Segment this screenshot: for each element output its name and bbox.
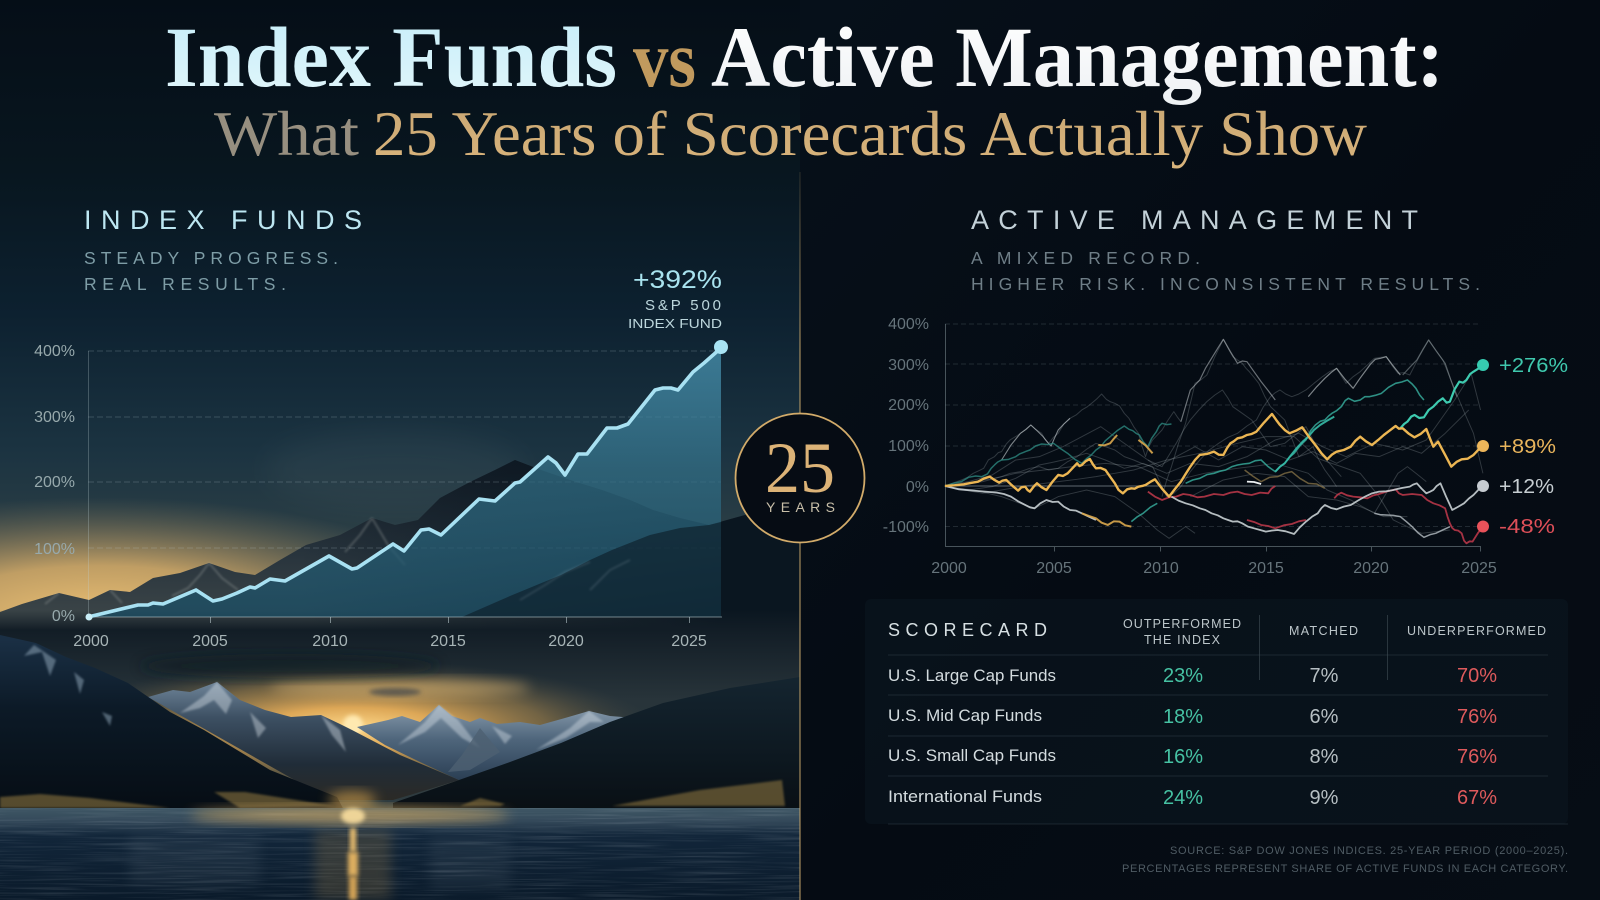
center divider [799,172,801,900]
subtitle: 25 Years of Scorecards Actually Show [373,99,1368,169]
x axis [88,616,722,618]
x axis labels: 2015 [1248,560,1284,577]
faint fund lines [945,339,1483,543]
area under line [88,348,721,617]
y axis labels: 0% [52,608,75,625]
chart grid [88,351,721,548]
heading: active management: ACTIVE MANAGEMENT [971,205,1418,235]
heading: active management: A MIXED RECORD. [971,248,1200,268]
heading: index funds: REAL RESULTS. [84,274,286,294]
x axis labels: 2025 [1461,560,1497,577]
icon: dark forested mountains [0,635,800,812]
row: mid cap: 18% [1163,706,1203,728]
y axis labels: 400% [34,343,75,360]
badge: 25 years: 25 [765,428,835,508]
column headers: MATCHED [1289,624,1358,638]
series end labels: +89% [1499,436,1556,458]
y axis labels: 300% [34,409,75,426]
source note: PERCENTAGES REPRESENT SHARE OF ACTIVE FUNDS IN EACH CATEGORY. [1122,863,1568,875]
series end labels [1499,355,1568,538]
column headers [1123,617,1546,647]
row: large cap: 70% [1457,665,1497,687]
heading: index funds [84,205,362,294]
chart grid [945,324,1481,526]
row: international [888,787,1497,809]
heading: index funds: INDEX FUNDS [84,205,362,235]
panel: index funds landscape background [0,66,800,808]
title [165,9,1444,105]
heading: index funds: STEADY PROGRESS. [84,248,338,268]
x axis labels: 2025 [671,633,707,650]
row: small cap: U.S. Small Cap Funds [888,746,1056,765]
x axis labels: 2010 [1143,560,1179,577]
y axis labels: -100% [883,519,929,536]
row: large cap: 7% [1310,665,1339,687]
scorecard heading: SCORECARD [888,620,1047,640]
row: international: 9% [1310,787,1339,809]
white fund line [945,483,1483,534]
red fund line [1148,486,1483,543]
row: international: International Funds [888,787,1042,806]
row: small cap: 8% [1310,746,1339,768]
chart: active management lines [883,316,1568,577]
title: vs [633,16,696,104]
teal fund line [945,423,1171,486]
column headers: OUTPERFORMED [1123,617,1241,631]
callout: +392% [628,266,722,331]
column headers: UNDERPERFORMED [1407,624,1546,638]
row: small cap [888,746,1497,768]
icon: golden shoreline [0,780,785,808]
row: mid cap: U.S. Mid Cap Funds [888,706,1042,725]
row: large cap: 23% [1163,665,1203,687]
callout: +392%: +392% [633,266,722,294]
y axis labels: 100% [34,541,75,558]
source note [1122,845,1568,875]
callout: +392%: S&P 500 [645,297,721,314]
x axis labels: 2020 [548,633,584,650]
trend line [88,348,721,617]
y axis labels: 0% [906,479,929,496]
row: small cap: 76% [1457,746,1497,768]
row: international: 24% [1163,787,1203,809]
badge: 25 years [736,414,864,542]
panel: scorecard table [865,599,1568,824]
row: mid cap: 6% [1310,706,1339,728]
x axis labels: 2000 [931,560,967,577]
y axis labels: 100% [888,438,929,455]
row: international: 67% [1457,787,1497,809]
title: Index Funds [165,9,617,105]
icon: valley glow [328,791,376,809]
icon: distant snow mountains [148,682,635,800]
title: Active Management: [711,9,1444,105]
y axis labels [34,343,75,625]
series end labels: +12% [1499,476,1554,498]
y axis labels [883,316,929,536]
x axis labels: 2010 [312,633,348,650]
y axis labels: 400% [888,316,929,333]
column headers: THE INDEX [1144,633,1221,647]
series end labels: +276% [1499,355,1568,377]
series end labels: -48% [1499,516,1555,538]
panel: right background [800,0,1600,900]
row: large cap: U.S. Large Cap Funds [888,666,1056,685]
callout: +392%: INDEX FUND [628,316,722,331]
icon: lake with sun reflection [0,807,800,900]
source note: SOURCE: S&P DOW JONES INDICES. 25-YEAR PERIOD (2000–2025). [1170,845,1568,857]
chart: index funds growth [34,266,728,650]
row: small cap: 16% [1163,746,1203,768]
x axis labels: 2005 [1036,560,1072,577]
y axis labels: 200% [34,474,75,491]
gold fund line [945,414,1483,497]
row: large cap [888,665,1497,687]
y axis labels: 300% [888,357,929,374]
x axis labels [73,633,707,650]
dark foreground slope [462,522,721,617]
x axis labels: 2000 [73,633,109,650]
series end dots [1477,359,1489,371]
row: mid cap [888,706,1497,728]
subtitle: What [214,99,360,169]
y axis labels: 200% [888,397,929,414]
heading: active management [971,205,1480,294]
x axis labels: 2015 [430,633,466,650]
x axis labels: 2005 [192,633,228,650]
badge: 25 years: YEARS [766,499,835,515]
x axis labels [931,560,1497,577]
row: mid cap: 76% [1457,706,1497,728]
endpoint dot [714,340,728,354]
heading: active management: HIGHER RISK. INCONSISTENT RESULTS. [971,274,1480,294]
x axis labels: 2020 [1353,560,1389,577]
